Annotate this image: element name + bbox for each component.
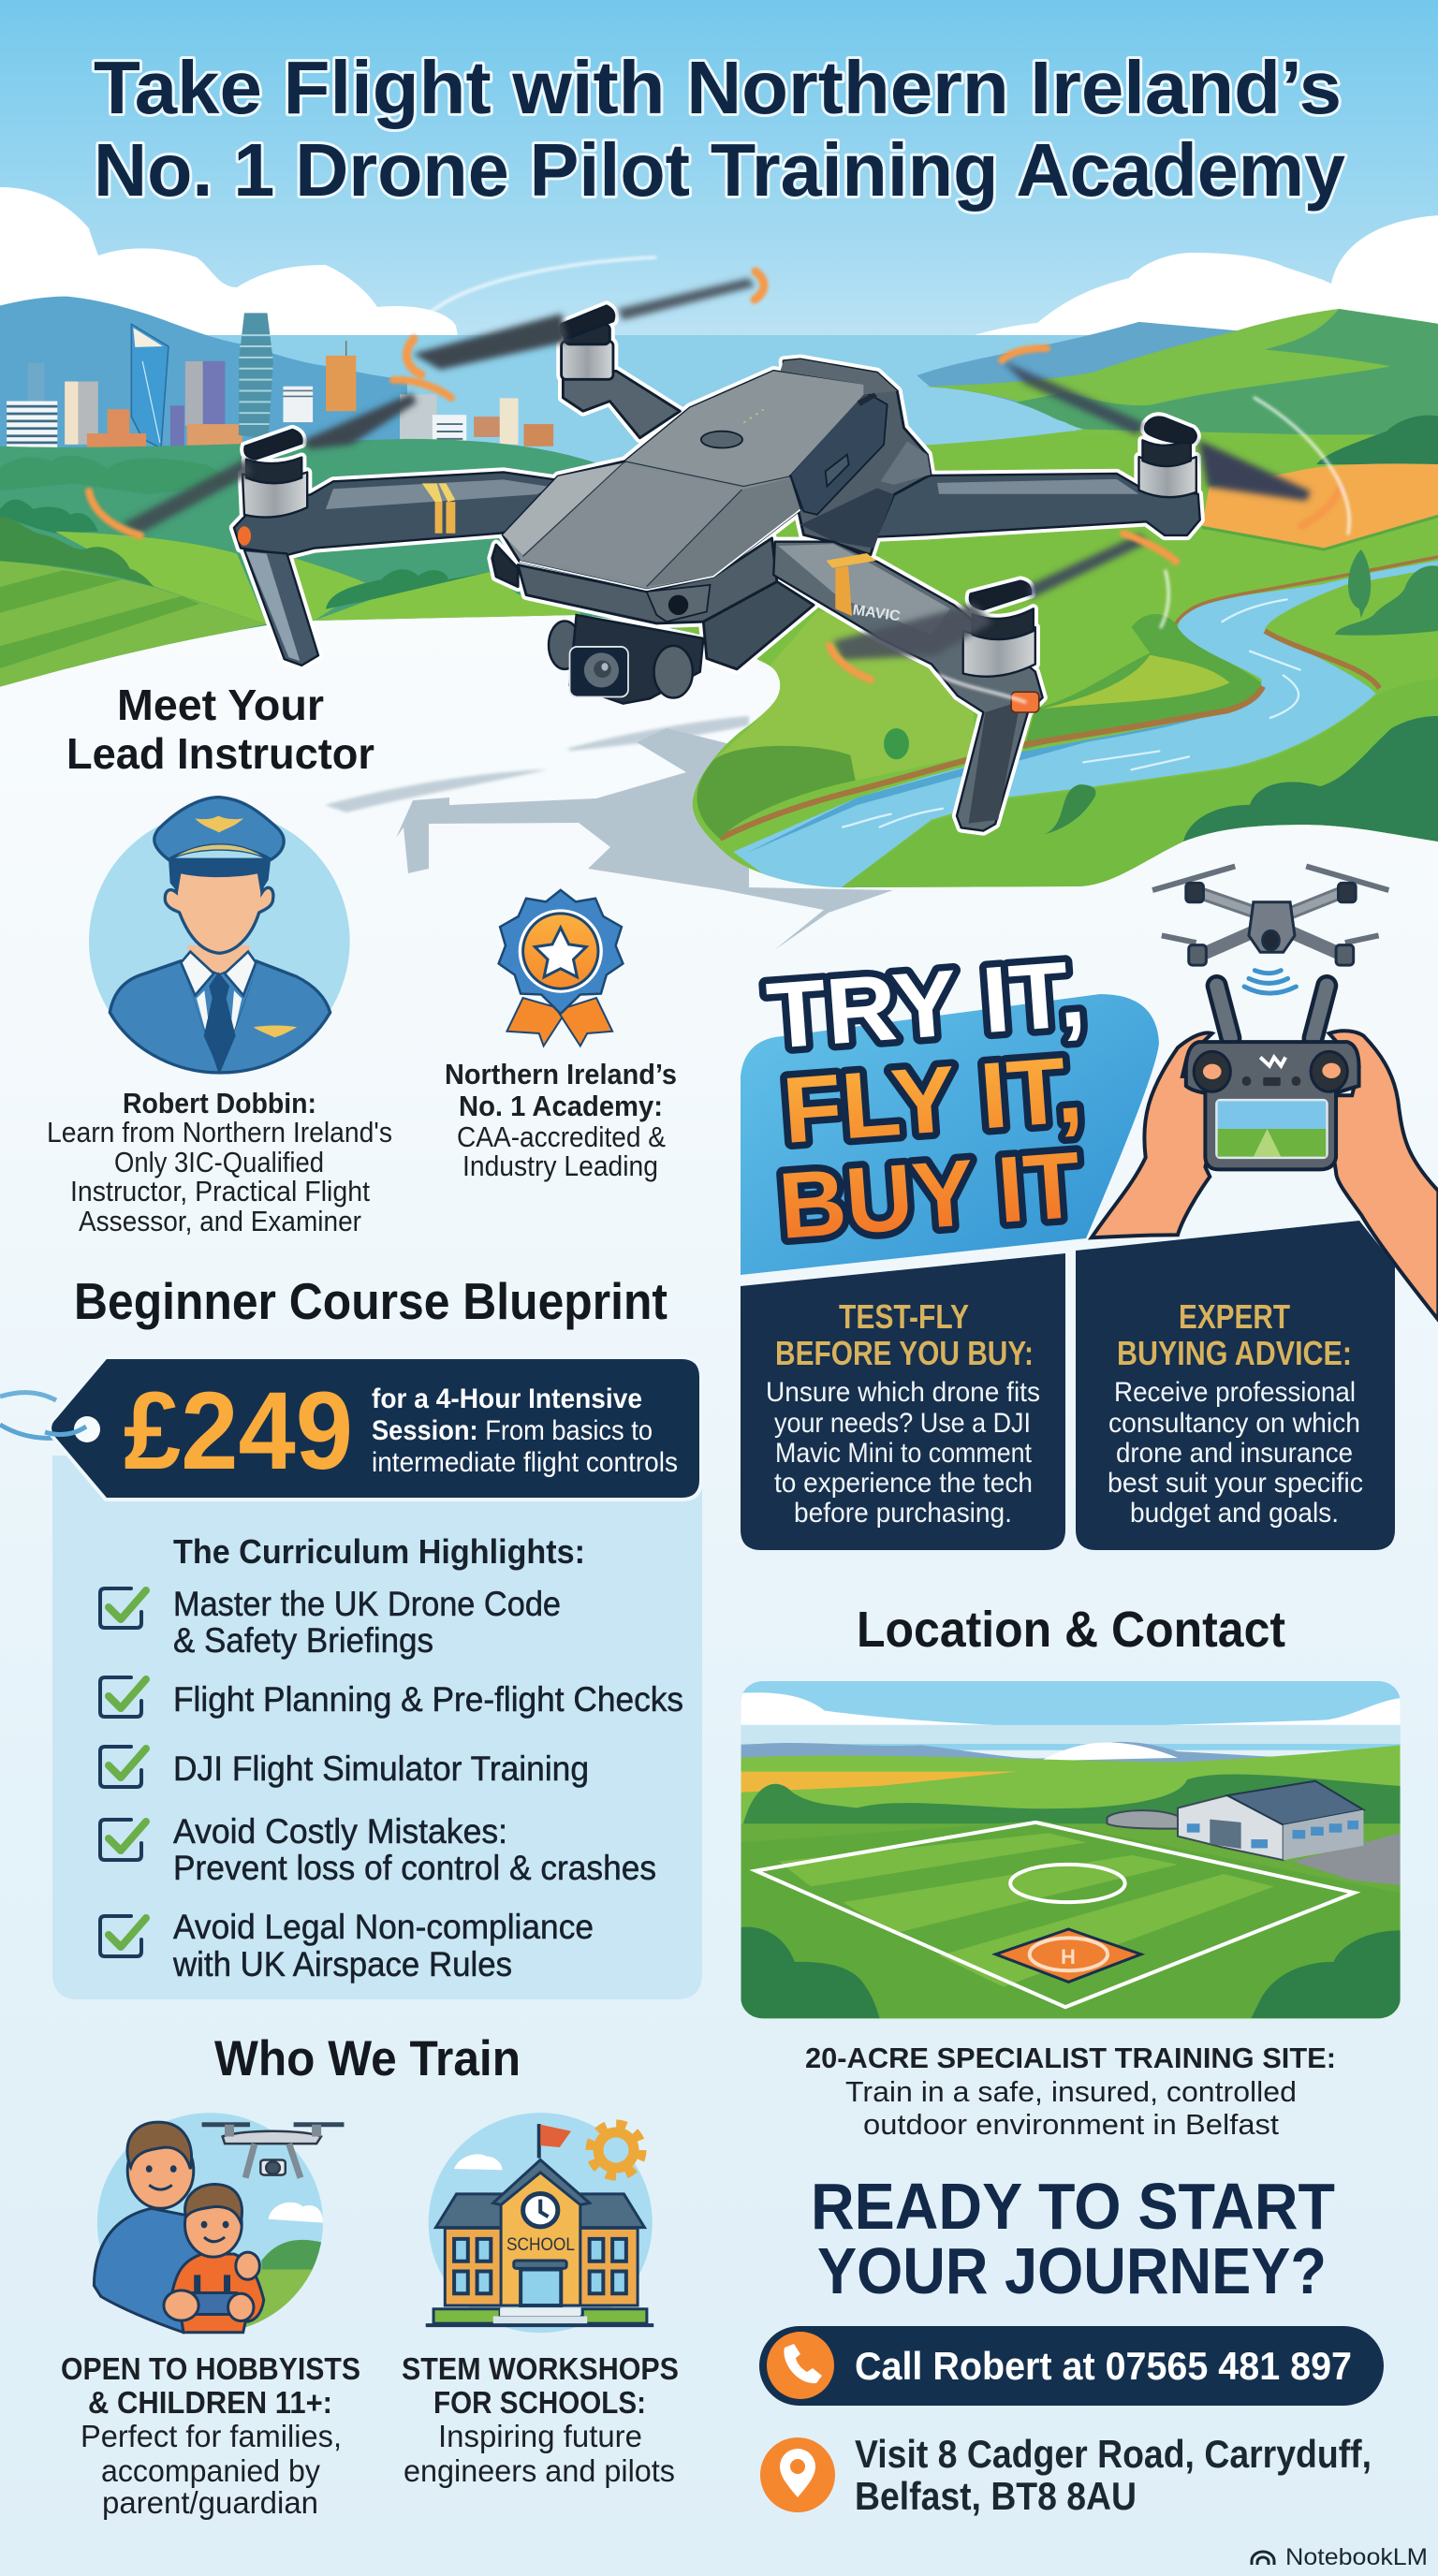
curriculum list: Avoid Costly Mistakes:: [173, 1812, 507, 1851]
school sign: SCHOOL: [506, 2235, 575, 2255]
curriculum list: DJI Flight Simulator Training: [173, 1749, 589, 1788]
dark hill: [697, 746, 856, 839]
hills: left side and city: [0, 297, 703, 687]
panel: test-fly before you buy: to experience the tech: [774, 1468, 1033, 1499]
hands and controller: [1092, 1032, 1219, 1237]
panel: test-fly before you buy: before purchasing.: [794, 1498, 1012, 1529]
text: Robert Dobbin bio: Assessor, and Examiner: [79, 1205, 361, 1237]
text: STEM workshops: Inspiring future: [438, 2419, 642, 2453]
text: training site: outdoor environment in Belfast: [863, 2108, 1279, 2141]
curriculum list: Flight Planning & Pre-flight Checks: [173, 1680, 683, 1719]
text: No. 1 Academy: No. 1 Academy:: [459, 1090, 663, 1122]
price tag: £249: [124, 1369, 353, 1493]
curriculum list: [172, 1585, 683, 1983]
text: No. 1 Academy: CAA-accredited &: [457, 1120, 666, 1153]
text: hobbyists and children: OPEN TO HOBBYISTS: [61, 2351, 360, 2386]
icon: map pin: [780, 2449, 815, 2497]
text: hobbyists and children: accompanied by: [101, 2453, 320, 2488]
text: training site: [805, 2042, 1336, 2141]
panel: try it background: [741, 994, 1159, 1275]
text: Robert Dobbin bio: Instructor, Practical Flight: [70, 1175, 370, 1208]
front-right arm: [773, 542, 1043, 831]
icon: gear: [591, 2125, 641, 2175]
curriculum list: Master the UK Drone Code: [173, 1585, 561, 1623]
rear-left arm: [561, 306, 680, 438]
address: Visit 8 Cadger Road, Carryduff,: [855, 2432, 1372, 2476]
propellers: [122, 278, 1311, 660]
curriculum list: Avoid Legal Non-compliance: [173, 1908, 594, 1946]
river: [733, 561, 1438, 889]
text: training site: 20-ACRE SPECIALIST TRAINING SITE:: [805, 2042, 1336, 2074]
right arm: [843, 417, 1200, 538]
phone pill: [759, 2326, 1384, 2406]
front-right arm: MAVIC: [852, 602, 902, 624]
text: STEM workshops: FOR SCHOOLS:: [433, 2385, 646, 2420]
drone illustration: [89, 257, 1349, 831]
price tag: for a 4-Hour Intensive: [372, 1383, 642, 1414]
panel: test-fly before you buy: [741, 1253, 1065, 1550]
white outline of the whole drone: [234, 306, 1200, 831]
text: hobbyists and children: & CHILDREN 11+:: [88, 2385, 332, 2420]
title: Take Flight with Northern Ireland’s: [94, 46, 1342, 129]
slogan: try it, fly it, buy it: BUY IT: [775, 1133, 1084, 1259]
price tag: [0, 1357, 701, 1500]
curriculum list: & Safety Briefings: [173, 1621, 433, 1660]
panel: expert buying advice: best suit your specific: [1108, 1468, 1363, 1499]
icon: clouds: [0, 187, 1438, 335]
panel: expert buying advice: BUYING ADVICE:: [1117, 1334, 1352, 1372]
heading: meet your lead instructor: Lead Instructor: [66, 729, 374, 778]
heading: who we train: Who We Train: [214, 2031, 521, 2086]
phone pill: Call Robert at 07565 481 897: [855, 2344, 1352, 2388]
heading: meet your lead instructor: Meet Your: [117, 681, 324, 729]
left arm: [234, 430, 580, 666]
text: Robert Dobbin bio: Only 3IC-Qualified: [114, 1146, 324, 1178]
text: hobbyists and children: Perfect for families,: [81, 2419, 342, 2453]
panel: expert buying advice: drone and insurance: [1116, 1438, 1353, 1469]
icon: school building: [426, 2113, 653, 2333]
call to action heading: YOUR JOURNEY?: [817, 2234, 1327, 2307]
propeller tips and motion arcs: [89, 257, 1349, 702]
text: STEM workshops: [402, 2351, 679, 2488]
curriculum heading: The Curriculum Highlights:: [173, 1532, 585, 1571]
small drone: [1152, 867, 1388, 965]
heading: beginner course blueprint: Beginner Course Blueprint: [74, 1272, 668, 1330]
slogan: try it, fly it, buy it: FLY IT,: [779, 1037, 1086, 1164]
signal waves: [1244, 971, 1296, 993]
icon: phone: [784, 2344, 822, 2383]
panel: curriculum: [0, 1357, 702, 1999]
icon: hands holding controller with drone: [1092, 867, 1438, 1320]
text: No. 1 Academy: Northern Ireland’s: [445, 1058, 677, 1090]
ground: right landscape: [674, 421, 1438, 889]
panel: expert buying advice: EXPERT: [1179, 1297, 1290, 1336]
text: Robert Dobbin bio: Learn from Northern Ireland's: [47, 1116, 392, 1149]
slogan: try it, fly it, buy it: [763, 941, 1089, 1259]
price tag: Session: From basics to: [372, 1415, 653, 1446]
call to action heading: READY TO START: [811, 2170, 1335, 2243]
heading: location and contact: Location & Contact: [857, 1602, 1285, 1658]
text: hobbyists and children: [61, 2351, 360, 2520]
curriculum list: Prevent loss of control & crashes: [173, 1849, 656, 1887]
panel: test-fly before you buy: your needs? Use a DJI: [774, 1408, 1031, 1439]
text: STEM workshops: engineers and pilots: [404, 2453, 675, 2488]
curriculum list: with UK Airspace Rules: [172, 1945, 512, 1983]
slogan: try it, fly it, buy it: TRY IT,: [763, 941, 1089, 1069]
panel: expert buying advice: [1076, 1221, 1395, 1550]
icon: parent and child with drone: [94, 2113, 344, 2334]
text: No. 1 Academy: Industry Leading: [462, 1149, 658, 1182]
drone camera: [549, 615, 703, 704]
icon: award medal: [499, 890, 623, 1046]
hero landscape illustration: [0, 0, 1438, 889]
sky drone: [202, 2125, 345, 2178]
trees: [1348, 549, 1371, 618]
text: training site: Train in a safe, insured, controlled: [845, 2075, 1297, 2108]
heading: meet your lead instructor: [66, 681, 374, 778]
text: hobbyists and children: parent/guardian: [102, 2485, 318, 2520]
title: [94, 46, 1345, 212]
icons: check boxes: [100, 1588, 146, 1956]
address: [760, 2432, 1372, 2518]
ground: left fields: [0, 439, 703, 687]
city skyline: [7, 313, 553, 454]
panel: test-fly before you buy: Mavic Mini to comment: [775, 1438, 1033, 1469]
sea: [206, 335, 1089, 462]
panel: expert buying advice: budget and goals.: [1130, 1498, 1339, 1529]
panel: expert buying advice: Receive professional: [1114, 1377, 1356, 1408]
title: No. 1 Drone Pilot Training Academy: [94, 128, 1345, 212]
panel: test-fly before you buy: TEST-FLY: [839, 1297, 969, 1336]
address: Belfast, BT8 8AU: [855, 2474, 1137, 2518]
helipad letter: H: [1061, 1945, 1076, 1969]
text: STEM workshops: STEM WORKSHOPS: [402, 2351, 679, 2386]
drone body: [492, 359, 931, 704]
training site illustration: [741, 1681, 1401, 2031]
drone shadow: [325, 716, 893, 950]
call to action heading: [811, 2170, 1335, 2307]
text: Robert Dobbin bio: Robert Dobbin:: [123, 1087, 316, 1120]
panel: expert buying advice: consultancy on which: [1108, 1408, 1360, 1439]
icon: pilot portrait: [89, 798, 350, 1073]
text: No. 1 Academy: [445, 1058, 677, 1182]
NotebookLM watermark: NotebookLM: [1285, 2544, 1428, 2570]
text: Robert Dobbin bio: [47, 1087, 392, 1237]
price tag: intermediate flight controls: [372, 1447, 678, 1478]
panel: test-fly before you buy: BEFORE YOU BUY:: [775, 1334, 1034, 1372]
panel: test-fly before you buy: Unsure which drone fits: [766, 1377, 1040, 1408]
